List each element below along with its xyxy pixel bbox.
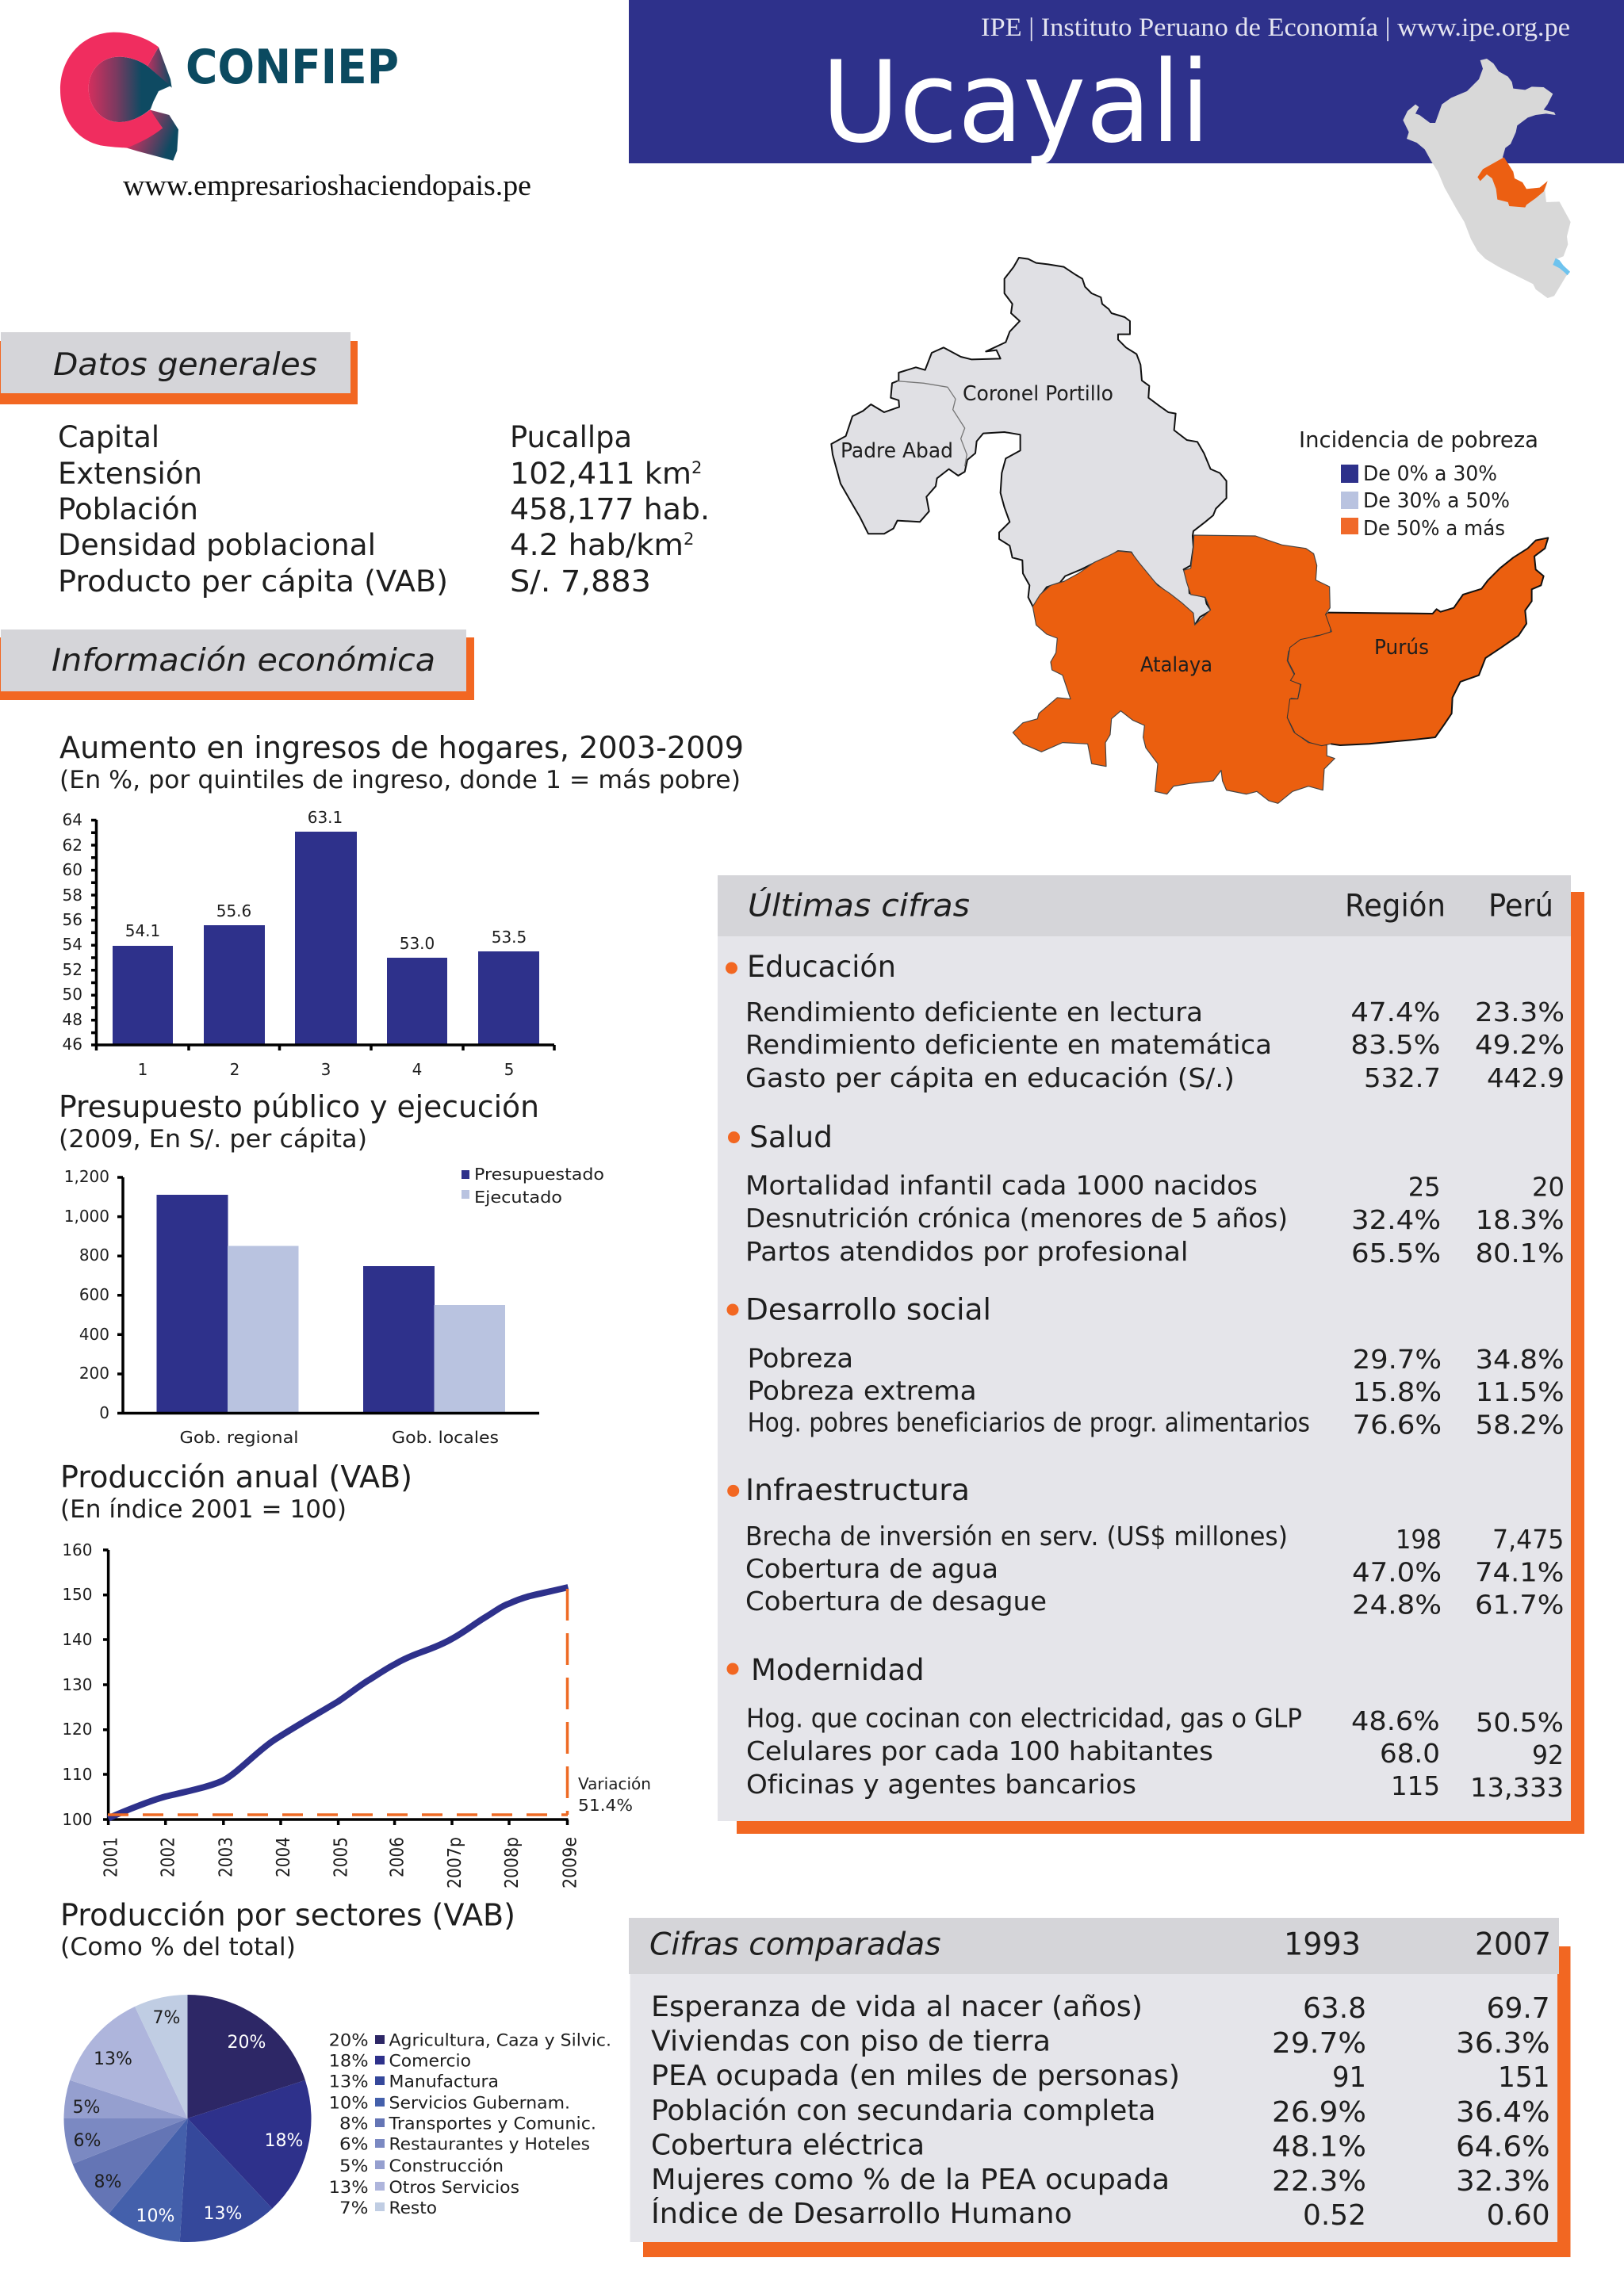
legend: sectors: Comercio (389, 2052, 471, 2071)
bar chart: budget and execution: 1,200 (64, 1167, 109, 1186)
legend: sectors: Restaurantes y Hoteles (389, 2135, 590, 2154)
section: Salud: Partos atendidos por profesional (745, 1236, 1188, 1267)
bar chart: household income by quintile (63, 808, 554, 1079)
section: Salud: 65.5% (1351, 1238, 1441, 1269)
row: human development index: Índice de Desarrollo Humano (651, 2197, 1072, 2230)
section: Educación: 49.2% (1475, 1029, 1565, 1060)
line chart: annual production: 2001 (101, 1837, 121, 1877)
row: electricity coverage (651, 2130, 1550, 2163)
website URL: www.empresarioshaciendopais.pe (123, 170, 531, 202)
bar chart: household income by quintile: 2 (230, 1060, 239, 1079)
logo: CONFIEP (60, 33, 399, 161)
chart heading: public budget (59, 1089, 539, 1154)
section: Salud: Salud (749, 1120, 833, 1154)
panel: general data: 2 (684, 530, 694, 549)
section: Salud: 20 (1532, 1172, 1565, 1203)
row: dirt floor housing: 36.3% (1456, 2027, 1550, 2060)
panel: Últimas cifras: Perú (1488, 888, 1553, 924)
pie chart: production by sector: 20% (228, 2033, 266, 2053)
legend: poverty incidence: Incidencia de pobreza (1299, 427, 1538, 453)
line chart: annual production: 120 (62, 1720, 92, 1739)
bar chart: household income by quintile: 56 (63, 910, 82, 929)
section: Modernidad: 48.6% (1351, 1705, 1440, 1736)
bar chart: household income by quintile: 52 (63, 960, 82, 979)
section: Educación: 532.7 (1364, 1062, 1441, 1093)
section: Desarrollo social: 11.5% (1476, 1376, 1565, 1407)
section: Salud (728, 1120, 1565, 1269)
bar chart: budget and execution: Gob. regional (179, 1428, 298, 1447)
bar chart: budget and execution: Gob. locales (392, 1428, 499, 1447)
section: Infraestructura: 198 (1396, 1524, 1442, 1555)
label: Atalaya: Atalaya (1140, 653, 1212, 677)
line chart: annual production (62, 1540, 651, 1888)
panel: general data: 102,411 km (510, 457, 691, 491)
panel heading: Datos generales: Datos generales (53, 347, 317, 383)
row: secondary education: Población con secundaria completa (651, 2095, 1156, 2127)
section: Salud: Desnutrición crónica (menores de 5 años) (745, 1203, 1288, 1234)
panel: Cifras comparadas: Cifras comparadas (649, 1927, 941, 1963)
section: Modernidad: 68.0 (1380, 1738, 1440, 1769)
legend: poverty incidence: De 30% a 50% (1363, 489, 1510, 513)
bar chart: household income by quintile: 5 (504, 1060, 514, 1079)
legend: sectors: 10% (329, 2093, 369, 2112)
chart heading: production by sector: Producción por sectores (VAB) (60, 1898, 515, 1933)
section: Desarrollo social: 34.8% (1476, 1344, 1565, 1375)
section: Infraestructura: Brecha de inversión en serv. (US$ millones) (745, 1521, 1288, 1552)
section: Infraestructura: 74.1% (1475, 1556, 1564, 1587)
legend: sectors: 20% (329, 2031, 369, 2050)
panel: Cifras comparadas (629, 1918, 1570, 2257)
legend: sectors: 18% (329, 2052, 369, 2071)
panel: general data: 2 (691, 458, 702, 477)
callout: variation (578, 1774, 651, 1815)
panel: general data: 458,177 hab. (510, 492, 710, 526)
label: Coronel Portillo: Coronel Portillo (963, 382, 1113, 406)
row: employed labour force: 151 (1498, 2061, 1550, 2094)
section: Educación: Rendimiento deficiente en lectura (745, 997, 1203, 1027)
callout: variation: Variación (578, 1774, 651, 1793)
bar chart: budget and execution: 400 (79, 1325, 109, 1344)
icon: CONFIEP C mark (60, 33, 178, 161)
legend: budget (462, 1165, 604, 1207)
section: Infraestructura: 61.7% (1475, 1590, 1564, 1621)
line chart: annual production: 2002 (159, 1837, 179, 1877)
row: dirt floor housing (651, 2026, 1550, 2060)
row: human development index: 0.60 (1487, 2199, 1550, 2232)
bar chart: household income by quintile: 58 (63, 886, 82, 905)
section: Educación: Gasto per cápita en educación (S/.) (745, 1062, 1235, 1093)
section: Educación (726, 950, 1565, 1093)
section: Modernidad: Hog. que cocinan con electricidad, gas o GLP (746, 1703, 1302, 1734)
line chart: annual production: 110 (62, 1765, 92, 1784)
line chart: annual production: 130 (62, 1675, 92, 1694)
row: employed labour force: PEA ocupada (en miles de personas) (651, 2060, 1180, 2092)
panel: general data: Producto per cápita (VAB) (58, 564, 448, 599)
panel: general data: Extensión (58, 457, 202, 491)
bar chart: household income by quintile: 48 (63, 1010, 82, 1029)
legend: sectors: Manufactura (389, 2072, 499, 2091)
section: Educación: Educación (747, 950, 896, 984)
map: Ucayali provinces (831, 258, 1548, 803)
bar chart: household income by quintile: 53.0 (400, 934, 435, 953)
legend: sectors (329, 2031, 611, 2218)
panel: Cifras comparadas: 1993 (1284, 1927, 1361, 1963)
legend: budget: Ejecutado (474, 1188, 562, 1207)
row: employed labour force: 91 (1332, 2061, 1366, 2094)
bar chart: household income by quintile: 60 (63, 860, 82, 879)
legend: poverty incidence (1299, 427, 1538, 541)
row: secondary education (651, 2095, 1550, 2129)
bar chart: household income by quintile: 62 (63, 836, 82, 855)
bar chart: budget and execution (64, 1165, 604, 1447)
bar chart: household income by quintile: 3 (321, 1060, 331, 1079)
line chart: annual production: 2007p (445, 1837, 465, 1888)
panel: general data: S/. 7,883 (510, 564, 651, 599)
section: Educación: 47.4% (1350, 997, 1440, 1027)
section: Desarrollo social: 76.6% (1353, 1410, 1442, 1440)
province: Purús (1287, 538, 1548, 746)
pie chart: production by sector: 10% (136, 2206, 174, 2226)
row: women in labour force (651, 2164, 1550, 2198)
pie chart: production by sector: 18% (265, 2131, 303, 2151)
pie chart: production by sector: 7% (153, 2008, 180, 2028)
section: Educación: Rendimiento deficiente en matemática (745, 1029, 1272, 1060)
panel: general data: Densidad poblacional (58, 528, 376, 562)
label: Purús: Purús (1374, 636, 1429, 660)
chart heading: annual production: Producción anual (VAB) (60, 1460, 412, 1494)
row: women in labour force: Mujeres como % de la PEA ocupada (651, 2164, 1170, 2196)
pie chart: production by sector: 8% (94, 2172, 121, 2192)
section: Salud: Mortalidad infantil cada 1000 nacidos (745, 1170, 1258, 1200)
section: Desarrollo social (726, 1293, 1565, 1440)
row: secondary education: 26.9% (1272, 2096, 1366, 2129)
panel: general data (58, 420, 710, 599)
callout: variation: 51.4% (578, 1796, 633, 1815)
legend: sectors: 13% (329, 2178, 369, 2197)
line chart: annual production: 150 (62, 1585, 92, 1604)
section: Desarrollo social: Pobreza extrema (748, 1376, 977, 1406)
row: human development index (651, 2197, 1550, 2232)
province: Coronel Portillo and Padre Abad (831, 258, 1227, 625)
province: Atalaya (1013, 535, 1335, 803)
section: Infraestructura: 7,475 (1492, 1524, 1564, 1555)
row: electricity coverage: 48.1% (1272, 2131, 1366, 2163)
section: Modernidad (726, 1653, 1564, 1803)
panel: general data: Capital (58, 420, 159, 454)
legend: sectors: 8% (339, 2114, 368, 2133)
chart heading: household income: (En %, por quintiles de ingreso, donde 1 = más pobre) (59, 766, 741, 794)
panel: Últimas cifras: Últimas cifras (748, 886, 970, 924)
bar chart: household income by quintile: 46 (63, 1035, 82, 1054)
section: Educación: 442.9 (1487, 1062, 1565, 1093)
legend: sectors: 6% (339, 2135, 368, 2154)
bar chart: budget and execution: 0 (99, 1403, 109, 1422)
row: dirt floor housing: Viviendas con piso de tierra (651, 2026, 1051, 2058)
legend: poverty incidence: De 50% a más (1363, 517, 1505, 541)
wordmark: CONFIEP (186, 40, 399, 95)
row: life expectancy (651, 1991, 1550, 2025)
chart heading: production by sector (60, 1898, 515, 1961)
pie chart: production by sector (63, 1995, 312, 2242)
legend: sectors: 7% (339, 2198, 368, 2218)
legend: sectors: Resto (389, 2198, 437, 2218)
title: Ucayali (822, 37, 1210, 168)
bar chart: household income by quintile: 50 (63, 985, 82, 1004)
section: Infraestructura: Cobertura de agua (745, 1553, 998, 1584)
bar chart: household income by quintile: 55.6 (216, 901, 251, 920)
row: secondary education: 36.4% (1456, 2096, 1550, 2129)
panel: general data: Población (58, 492, 198, 526)
section: Infraestructura: 24.8% (1352, 1590, 1442, 1621)
section: Desarrollo social: 58.2% (1476, 1410, 1565, 1440)
line chart: annual production: 2005 (331, 1837, 351, 1877)
panel heading: Información económica: Información económica (52, 643, 435, 679)
section: Salud: 32.4% (1351, 1204, 1441, 1235)
chart heading: production by sector: (Como % del total) (60, 1933, 296, 1961)
row: life expectancy: Esperanza de vida al nacer (años) (651, 1991, 1143, 2023)
line chart: annual production: 2008p (502, 1837, 523, 1888)
panel: general data: 4.2 hab/km (510, 528, 684, 562)
section: Desarrollo social: 29.7% (1353, 1344, 1442, 1375)
section: Infraestructura: Cobertura de desague (745, 1586, 1047, 1617)
header banner (629, 0, 1624, 168)
chart heading: household income: Aumento en ingresos de hogares, 2003-2009 (59, 730, 744, 765)
section: Modernidad: 50.5% (1476, 1707, 1564, 1738)
legend: poverty incidence: De 0% a 30% (1363, 462, 1497, 486)
row: dirt floor housing: 29.7% (1272, 2027, 1366, 2060)
legend: sectors: 13% (329, 2072, 369, 2091)
row: electricity coverage: 64.6% (1456, 2131, 1550, 2163)
label: Padre Abad: Padre Abad (841, 439, 953, 463)
line chart: annual production: 2006 (387, 1837, 408, 1877)
section: Salud: 18.3% (1476, 1204, 1565, 1235)
line chart: annual production: 100 (62, 1810, 92, 1829)
section: Desarrollo social: Hog. pobres beneficiarios de progr. alimentarios (748, 1406, 1310, 1438)
section: Infraestructura: Infraestructura (745, 1473, 970, 1507)
panel: Últimas cifras: Región (1345, 888, 1446, 924)
legend: sectors: Agricultura, Caza y Silvic. (389, 2031, 611, 2050)
bar chart: budget and execution: 1,000 (64, 1207, 109, 1226)
section: Modernidad: 115 (1391, 1770, 1440, 1801)
legend: budget: Presupuestado (474, 1165, 604, 1184)
line chart: annual production: 160 (62, 1540, 92, 1559)
section: Desarrollo social: Pobreza (748, 1342, 853, 1373)
IPE credit line: IPE | Instituto Peruano de Economía | www.ipe.org.pe (981, 13, 1570, 42)
legend: sectors: Transportes y Comunic. (388, 2114, 596, 2133)
panel heading: Datos generales (0, 332, 358, 404)
legend: sectors: Servicios Gubernam. (389, 2093, 570, 2112)
map: Peru locator (1403, 59, 1571, 298)
pie chart: production by sector: 13% (94, 2049, 132, 2069)
row: life expectancy: 69.7 (1487, 1992, 1550, 2025)
section: Infraestructura: 47.0% (1352, 1556, 1442, 1587)
panel: Últimas cifras (718, 875, 1584, 1834)
section: Modernidad: Oficinas y agentes bancarios (746, 1769, 1136, 1800)
pie chart: production by sector: 13% (204, 2204, 242, 2224)
section: Salud: 80.1% (1476, 1238, 1565, 1269)
bar chart: budget and execution: 800 (79, 1246, 109, 1265)
bar chart: household income by quintile: 1 (138, 1060, 147, 1079)
pie chart: production by sector: 6% (74, 2131, 101, 2151)
line chart: annual production: 140 (62, 1630, 92, 1649)
chart heading: public budget: Presupuesto público y ejecución (59, 1089, 539, 1124)
line chart: annual production: 2009e (560, 1837, 580, 1888)
legend: sectors: Otros Servicios (389, 2178, 519, 2197)
panel: Cifras comparadas: 2007 (1475, 1927, 1551, 1963)
row: women in labour force: 32.3% (1456, 2165, 1550, 2198)
row: human development index: 0.52 (1303, 2199, 1366, 2232)
chart heading: household income (59, 730, 744, 794)
bar chart: budget and execution: 200 (79, 1364, 109, 1383)
row: electricity coverage: Cobertura eléctrica (651, 2130, 925, 2161)
bar chart: household income by quintile: 54.1 (125, 921, 160, 940)
section: Desarrollo social: Desarrollo social (745, 1293, 991, 1327)
bar chart: budget and execution: 600 (79, 1285, 109, 1304)
chart heading: annual production: (En índice 2001 = 100) (60, 1495, 347, 1524)
section: Salud: 25 (1408, 1172, 1441, 1203)
panel: general data: Pucallpa (510, 420, 632, 454)
row: employed labour force (651, 2060, 1550, 2094)
line chart: annual production: 2004 (274, 1837, 294, 1877)
legend: sectors: 5% (339, 2156, 368, 2175)
section: Modernidad: 13,333 (1470, 1772, 1564, 1803)
bar chart: household income by quintile: 53.5 (492, 928, 527, 947)
section: Educación: 23.3% (1475, 997, 1565, 1027)
bar chart: household income by quintile: 4 (412, 1060, 422, 1079)
pie chart: production by sector: 5% (73, 2098, 100, 2118)
bar chart: household income by quintile: 63.1 (308, 808, 343, 827)
section: Desarrollo social: 15.8% (1353, 1376, 1442, 1407)
row: women in labour force: 22.3% (1272, 2165, 1366, 2198)
section: Modernidad: 92 (1532, 1739, 1564, 1770)
section: Infraestructura (727, 1473, 1564, 1621)
section: Modernidad: Celulares por cada 100 habitantes (746, 1735, 1213, 1766)
line chart: annual production: 2003 (216, 1837, 237, 1877)
chart heading: public budget: (2009, En S/. per cápita) (59, 1125, 367, 1154)
panel heading: Información económica (0, 629, 474, 700)
bar chart: household income by quintile: 64 (63, 810, 82, 829)
row: life expectancy: 63.8 (1303, 1992, 1366, 2025)
bar chart: household income by quintile: 54 (63, 935, 82, 954)
legend: sectors: Construcción (389, 2156, 504, 2175)
section: Modernidad: Modernidad (751, 1653, 925, 1687)
section: Educación: 83.5% (1350, 1029, 1440, 1060)
chart heading: annual production (60, 1460, 412, 1524)
